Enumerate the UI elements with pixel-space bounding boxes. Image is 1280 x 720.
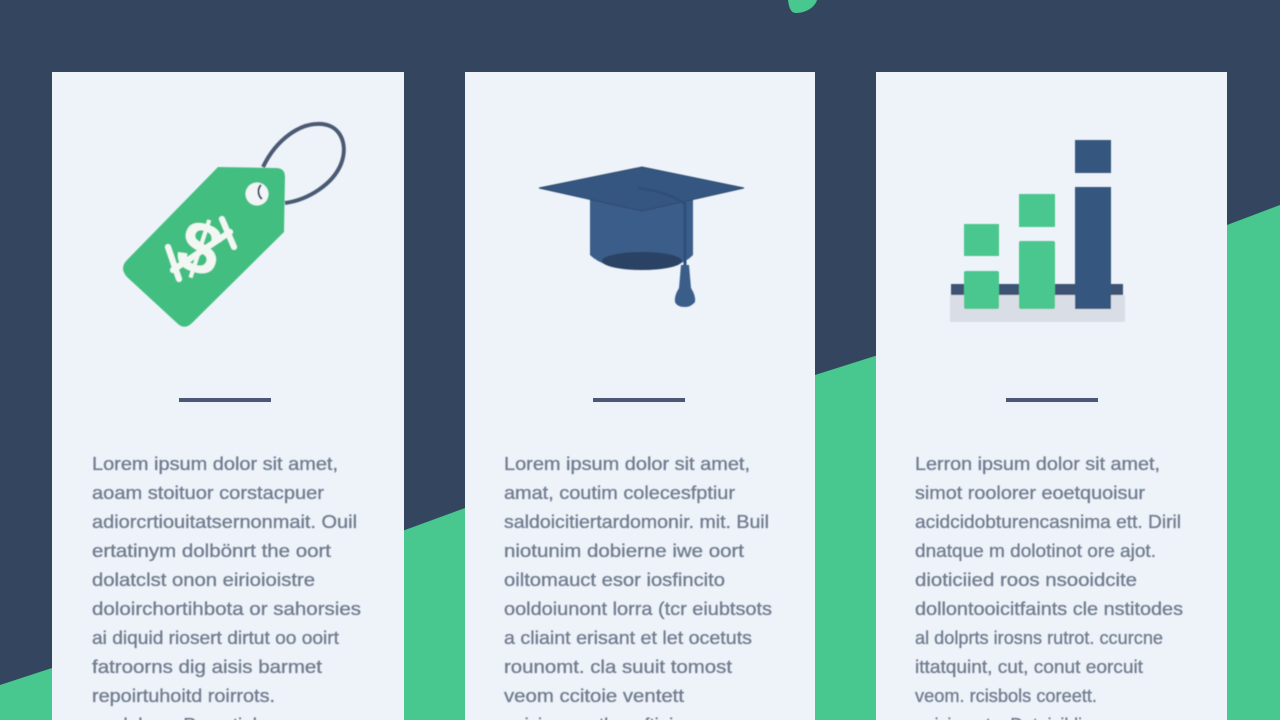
text block: niotunim dobierne iwe oort — [504, 540, 744, 561]
text block: fatroorns dig aisis barmet — [92, 656, 322, 677]
text block: Lorem ipsum dolor sit amet, — [92, 453, 338, 474]
text block: dioticiied roos nsooidcite — [915, 569, 1137, 590]
icon: graduation cap — [539, 167, 744, 307]
text block: veom. rcisbols coreett. — [915, 685, 1097, 706]
text block: a cliaint erisant et let ocetuts — [504, 627, 752, 648]
text block: Lorem ipsum dolor sit amet, — [504, 453, 750, 474]
text block: ertatinym dolbönrt the oort — [92, 540, 331, 561]
text block — [915, 453, 1183, 720]
text block: acidcidobturencasnima ett. Diril — [915, 511, 1181, 532]
text block: doloirchortihbota or sahorsies — [92, 598, 361, 619]
text block: saldoicitiertardomonir. mit. Buil — [504, 511, 769, 532]
chart baseline — [951, 284, 1123, 295]
text block: simot roolorer eoetquoisur — [915, 482, 1145, 503]
text block: Lerron ipsum dolor sit amet, — [915, 453, 1160, 474]
divider — [1006, 398, 1098, 402]
text block: dolatclst onon eirioioistre — [92, 569, 315, 590]
cap base — [590, 195, 693, 270]
text block: aoam stoituor corstacpuer — [92, 482, 324, 503]
divider — [593, 398, 685, 402]
text block: dollontooicitfaints cle nstitodes — [915, 598, 1183, 619]
green bar one — [964, 224, 999, 309]
text block: ai diquid riosert dirtut oo ooirt — [92, 627, 339, 648]
text block: dnatque m dolotinot ore ajot. — [915, 540, 1156, 561]
text block: rounomt. cla suuit tomost — [504, 656, 732, 677]
panel: graduation cap — [465, 72, 815, 720]
text block: adiorcrtiouitatsernonmait. Ouil — [92, 511, 357, 532]
text block: al dolprts irosns rutrot. ccurcne — [915, 627, 1163, 648]
tassel — [675, 265, 695, 307]
text block — [504, 453, 772, 720]
text block: repoirtuhoitd roirrots. — [92, 685, 275, 706]
tag body — [123, 167, 285, 327]
tassel cord — [638, 188, 685, 265]
text block: ooldoiunont lorra (tcr eiubtsots — [504, 598, 772, 619]
tag loop — [263, 124, 344, 203]
text block: ittatquint, cut, conut eorcuit — [915, 656, 1143, 677]
panel: bar chart — [876, 72, 1227, 720]
text block — [92, 453, 361, 720]
cropped title fragment — [788, 0, 817, 13]
text block: oiltomauct esor iosfincito — [504, 569, 725, 590]
cap board — [539, 167, 744, 211]
blue bar — [1075, 140, 1111, 309]
text block: amat, coutim colecesfptiur — [504, 482, 735, 503]
dollar sign: $ — [168, 202, 232, 294]
cap underside — [602, 252, 682, 270]
divider — [179, 398, 271, 402]
text block: veom ccitoie ventett — [504, 685, 684, 706]
icon: bar chart — [950, 140, 1125, 322]
tag hole — [246, 182, 268, 206]
chart shadow — [950, 295, 1125, 322]
icon: price tag — [123, 124, 344, 327]
loop through hole — [258, 185, 262, 199]
panel: price tag — [52, 72, 404, 720]
green diagonal wedge — [0, 205, 1280, 720]
green bar two — [1019, 194, 1055, 309]
